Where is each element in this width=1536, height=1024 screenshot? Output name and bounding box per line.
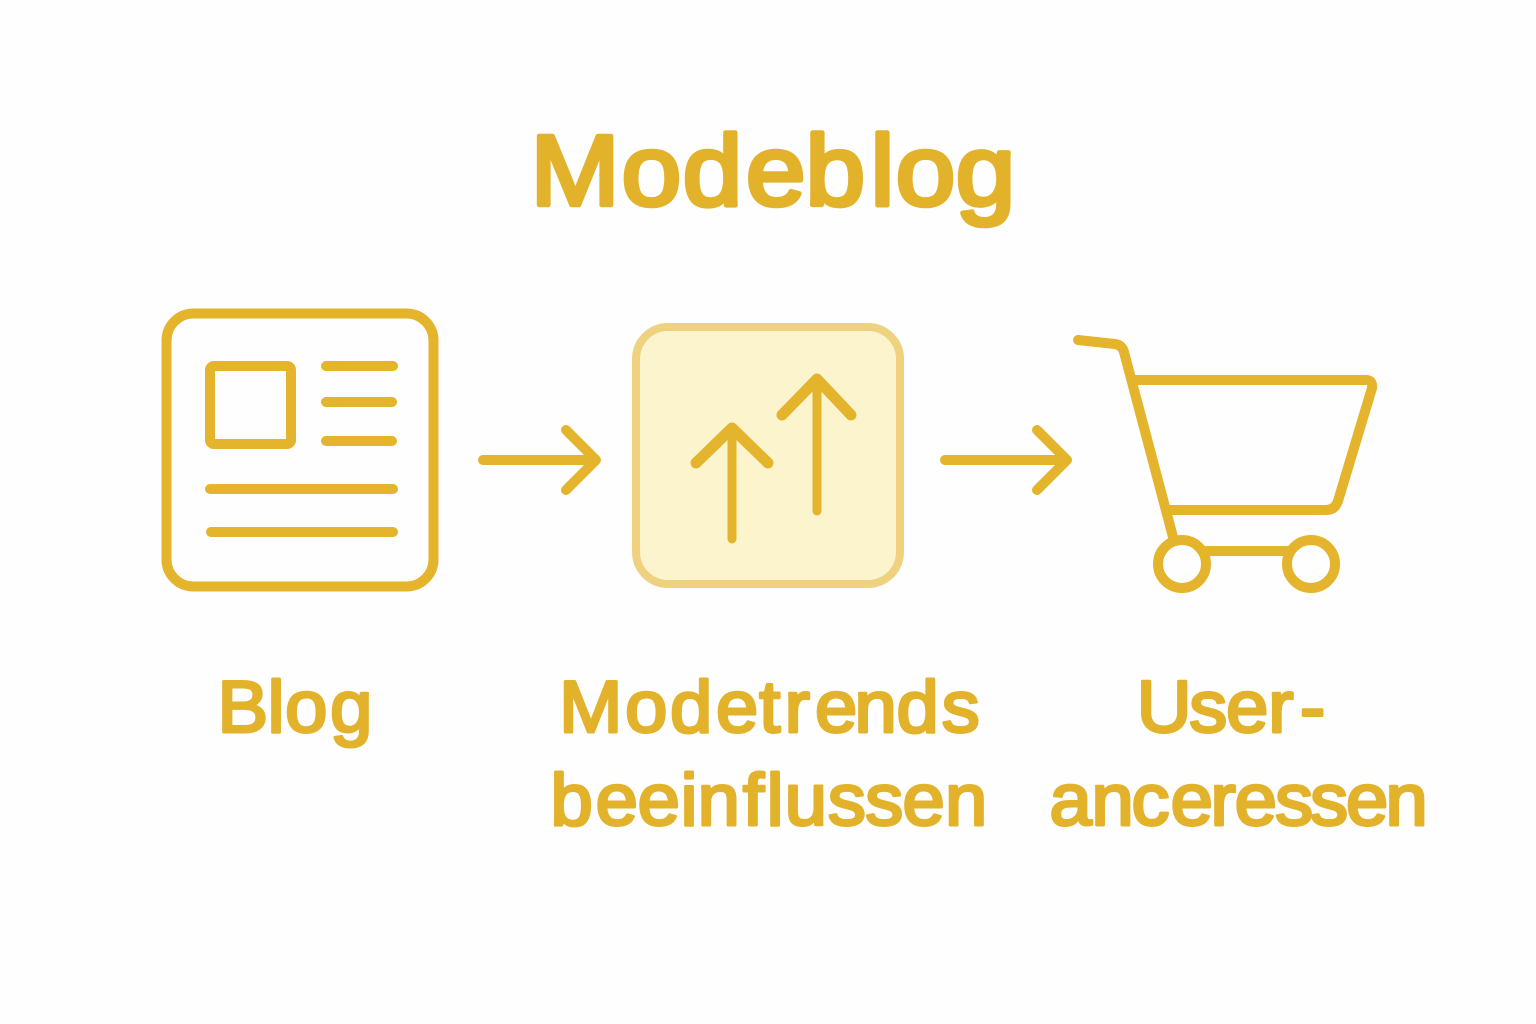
label: Blog: Blog — [217, 666, 372, 748]
label: User-anceressen: anceressen — [1049, 759, 1428, 841]
arrow: blog to trends — [483, 430, 596, 490]
label: Modetrends beeinflussen — [551, 666, 987, 841]
icon: blog page — [166, 314, 434, 586]
label: Modetrends beeinflussen: Modetrends — [559, 666, 980, 748]
icon: shopping cart — [1078, 340, 1372, 588]
icon: trends box with up arrows — [636, 327, 900, 584]
label: Modetrends beeinflussen: beeinflussen — [551, 759, 987, 841]
label: User-anceressen — [1049, 666, 1428, 841]
label: User-anceressen: User- — [1137, 666, 1325, 748]
arrow: trends to cart — [945, 430, 1067, 490]
title: Modeblog — [531, 114, 1015, 226]
